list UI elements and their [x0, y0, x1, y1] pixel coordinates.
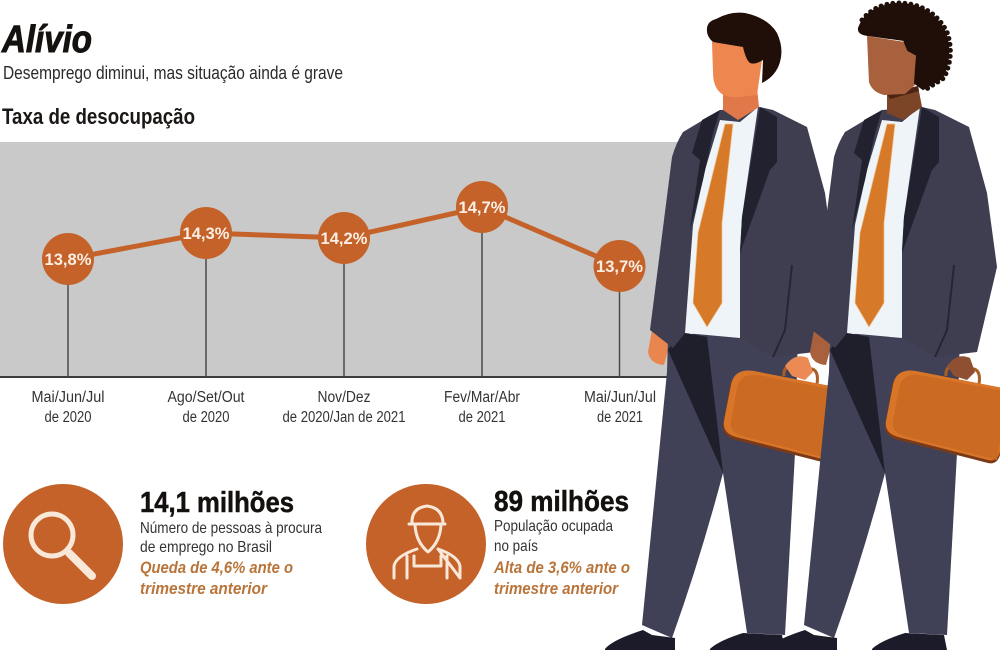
axis labels: de 2020 — [44, 409, 92, 426]
stat: people looking for work: trimestre anterior — [140, 579, 268, 598]
stat: people looking for work: de emprego no Brasil — [140, 539, 272, 556]
axis labels: de 2021 — [458, 409, 506, 426]
figure: man with dark skin and briefcase — [767, 3, 1000, 650]
axis labels: de 2021 — [597, 409, 643, 426]
stat: people looking for work: Número de pessoas à procura — [140, 520, 322, 537]
stat: employed population: 89 milhões — [494, 486, 629, 518]
axis labels: Mai/Jun/Jul — [32, 389, 104, 406]
axis labels: de 2020/Jan de 2021 — [282, 409, 406, 426]
stat: people looking for work: 14,1 milhões — [140, 487, 294, 519]
axis labels: Fev/Mar/Abr — [444, 389, 520, 406]
axis labels: de 2020 — [182, 409, 230, 426]
line chart: unemployment rate: 14,7% — [458, 198, 506, 217]
stat: employed population: População ocupada — [494, 518, 613, 535]
stat: employed population: no país — [494, 538, 538, 555]
chart heading: Taxa de desocupação — [2, 104, 195, 129]
stat: employed population — [493, 486, 630, 598]
line chart: unemployment rate: 14,2% — [320, 229, 368, 248]
line chart: unemployment rate: 13,8% — [44, 250, 92, 269]
line chart: unemployment rate: 14,3% — [182, 224, 230, 243]
axis labels: Mai/Jun/Jul — [584, 389, 656, 406]
line chart: unemployment rate: 13,7% — [596, 257, 643, 276]
axis labels: Nov/Dez — [318, 389, 370, 406]
stat: people looking for work: Queda de 4,6% ante o — [140, 558, 293, 577]
stat: people looking for work — [140, 487, 322, 598]
stat: employed population: trimestre anterior — [494, 579, 619, 598]
stat: employed population: Alta de 3,6% ante o — [493, 558, 630, 577]
title: Alívio — [1, 19, 92, 61]
subtitle: Desemprego diminui, mas situação ainda é grave — [3, 63, 343, 83]
icon: magnifying glass — [3, 484, 123, 604]
line chart: unemployment rate — [0, 142, 690, 378]
axis labels — [32, 389, 656, 426]
figure: man with light skin and briefcase — [605, 13, 850, 650]
axis labels: Ago/Set/Out — [168, 389, 245, 406]
icon: construction worker — [366, 484, 486, 604]
